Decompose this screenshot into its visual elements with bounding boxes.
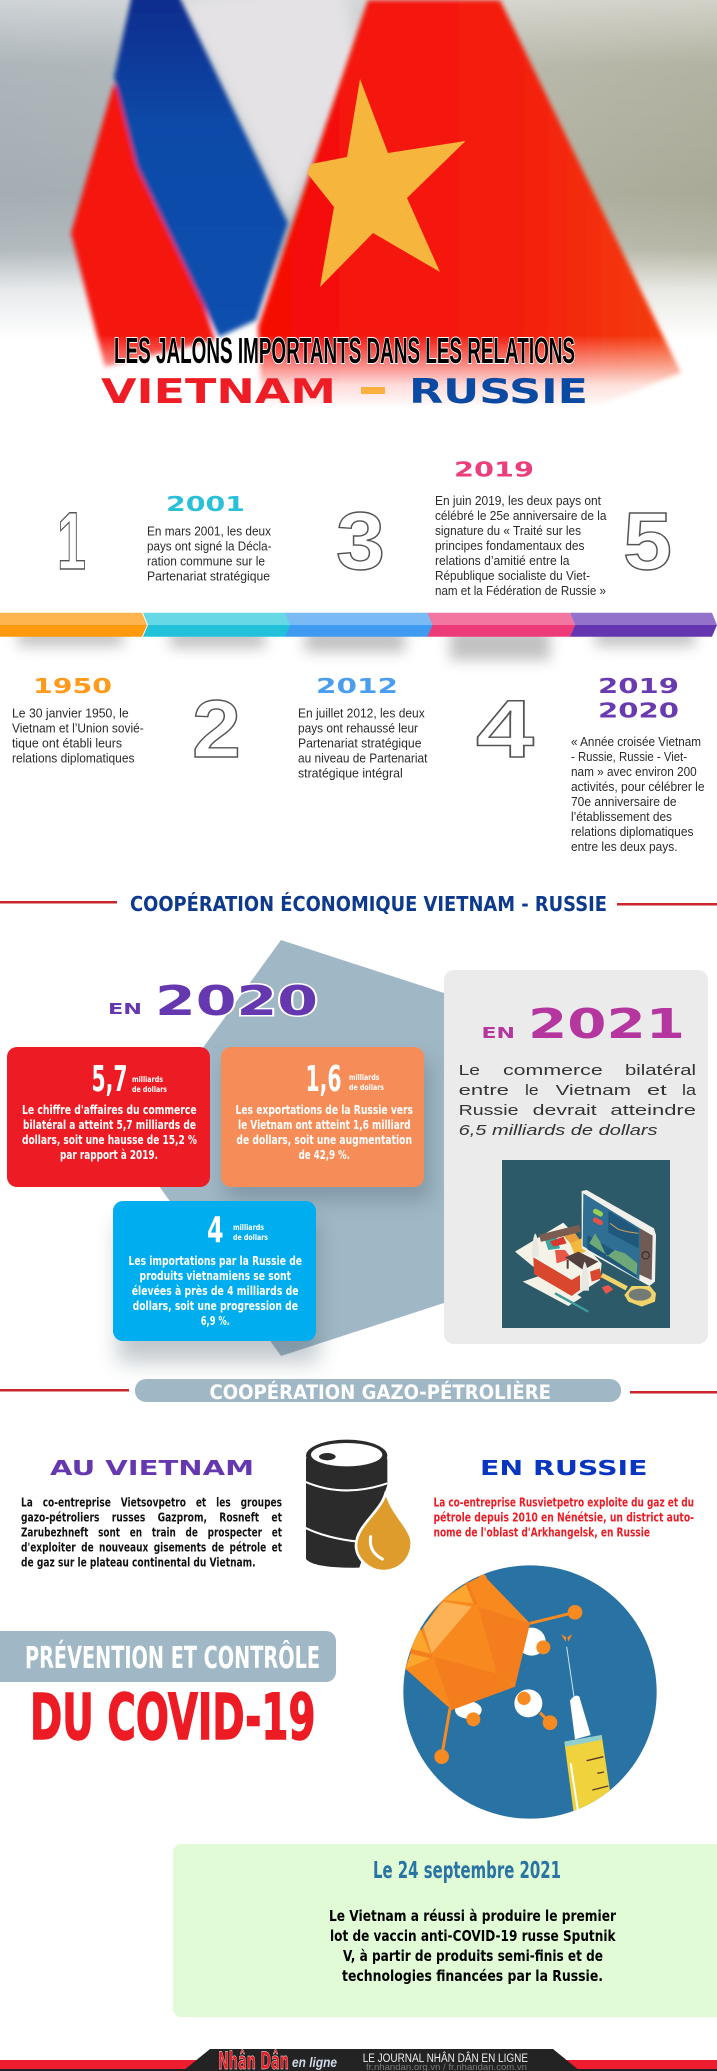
white stripe of the Russian flag (176, 0, 365, 223)
description: V, à partir de produits semi-finis et de (343, 1947, 603, 1965)
panel: en 2021 (444, 970, 708, 1344)
description: de 42,9 %. (299, 1148, 350, 1162)
milestone 2012 (298, 496, 428, 781)
description: nam » avec environ 200 (571, 765, 697, 779)
description: activités, pour célébrer le (571, 780, 705, 794)
heading: en 2020 (108, 977, 318, 1025)
segment 3 (285, 613, 433, 637)
figure: 1,6 (306, 1059, 342, 1100)
logo: en ligne (292, 2054, 337, 2070)
segment 5 (570, 613, 717, 637)
description: pays ont signé la Décla- (147, 540, 272, 554)
pencil (540, 1228, 580, 1247)
heading: 2021 (528, 1000, 685, 1048)
description: 6,5 milliards de dollars (459, 1122, 658, 1139)
section heading: oil and gas cooperation: COOPÉRATION GAZO-PÉTROLIÈRE (210, 1381, 551, 1404)
virus (405, 1574, 582, 1764)
description: de dollars, soit une augmentation (236, 1133, 412, 1147)
description: pays ont rehaussé leur (298, 722, 418, 736)
description: ration commune sur le (147, 555, 265, 569)
description: élevées à près de 4 milliards de (132, 1284, 299, 1298)
table (565, 1252, 598, 1270)
illustration: isometric trade dashboard (502, 1160, 670, 1328)
description: par rapport à 2019. (60, 1148, 158, 1162)
description: célébré le 25e anniversaire de la (435, 509, 607, 523)
description: atteindre (610, 1102, 696, 1119)
syringe (561, 1634, 610, 1811)
description: Vietnam (556, 1082, 631, 1099)
description: République socialiste du Viet- (435, 569, 590, 583)
star (307, 79, 466, 287)
description (435, 494, 607, 598)
barrel (305, 1440, 387, 1568)
description (298, 707, 428, 781)
pill (0, 1631, 336, 1682)
icon: oil barrel with drop (305, 1440, 412, 1571)
hero photo: flags of Russia and Vietnam (0, 0, 717, 430)
figure: de dollars (349, 1083, 384, 1092)
figure: de dollars (132, 1085, 167, 1094)
description: entre (459, 1082, 509, 1099)
years: 2019 (598, 674, 679, 698)
description: 70e anniversaire de (571, 795, 677, 809)
section heading: oil and gas cooperation (0, 1379, 717, 1404)
card: bilateral trade (7, 1047, 210, 1187)
description: produits vietnamiens se sont (140, 1269, 291, 1283)
description: En mars 2001, les deux (147, 525, 272, 539)
figure: de dollars (233, 1233, 268, 1242)
description: relations diplomatiques (571, 825, 694, 839)
title line 2: Russie: RUSSIE (409, 372, 588, 412)
sofa (533, 1257, 580, 1296)
year: 2019 (454, 458, 534, 482)
description: dollars, soit une progression de (133, 1299, 298, 1313)
description (236, 1103, 413, 1162)
title line 2: Vietnam: VIETNAM (101, 372, 336, 412)
dash (361, 387, 385, 394)
towers (532, 1233, 589, 1291)
description: et (647, 1082, 668, 1099)
description: gazo-pétroliers russes Gazprom, Rosneft et (21, 1511, 282, 1525)
number 5: 5 (623, 496, 672, 587)
panel: 24 September 2021 (173, 1844, 717, 2017)
description: relations d’amitié entre la (435, 554, 570, 568)
description: lot de vaccin anti-COVID-19 russe Sputnik (330, 1927, 616, 1945)
description (21, 1496, 282, 1570)
description (434, 1496, 694, 1540)
description: entre les deux pays. (571, 840, 678, 854)
description: nome de l'oblast d'Arkhangelsk, en Russie (434, 1526, 650, 1540)
milestone 2019-2020 (571, 496, 705, 854)
heading: EN RUSSIE (480, 1456, 648, 1480)
description (147, 525, 272, 584)
years: 2020 (598, 699, 679, 723)
description: Le Vietnam a réussi à produire le premier (329, 1907, 616, 1925)
blurred background (0, 0, 717, 324)
card: exports (221, 1047, 424, 1187)
description: « Année croisée Vietnam (571, 735, 701, 749)
description: le Vietnam ont atteint 1,6 milliard (238, 1118, 411, 1132)
description: le (525, 1082, 539, 1099)
oil drop (356, 1492, 412, 1571)
description: commerce (503, 1062, 603, 1079)
number 1: 1 (57, 496, 86, 587)
description: dollars, soit une hausse de 15,2 % (22, 1133, 197, 1147)
description: au niveau de Partenariat (298, 752, 428, 766)
heading: en 2020: 2020 (155, 977, 318, 1025)
description: d'exploiter de nouveaux gisements de pétrole et (21, 1541, 282, 1555)
Russian flag (71, 0, 288, 367)
description: La co-entreprise Vietsovpetro et les groupes (21, 1496, 282, 1510)
footer (0, 2047, 717, 2071)
heading (482, 1000, 685, 1048)
description: stratégique intégral (298, 767, 403, 781)
description (329, 1907, 616, 1985)
description: Le (459, 1062, 480, 1079)
description: - Russie, Russie - Viet- (571, 750, 687, 764)
description: de gaz sur le plateau continental du Vietnam. (21, 1556, 256, 1570)
figure: milliards (132, 1075, 163, 1084)
heading line 2: DU COVID-19 (30, 1681, 316, 1754)
description: Vietnam et l’Union sovié- (12, 722, 144, 736)
figure: milliards (233, 1223, 264, 1232)
dark plate (183, 2049, 580, 2071)
background pentagon (131, 940, 444, 1356)
date: Le 24 septembre 2021 (373, 1858, 561, 1884)
description (571, 735, 705, 854)
column: en Russie (434, 1456, 694, 1540)
description: signature du « Traité sur les (435, 524, 581, 538)
description: principes fondamentaux des (435, 539, 584, 553)
heading: en 2020: EN (108, 1000, 142, 1018)
description: Russie (459, 1102, 518, 1119)
years (598, 674, 679, 723)
number 4: 4 (476, 684, 534, 775)
paper sheets (515, 1223, 602, 1306)
description (12, 707, 144, 766)
description: Zarubezhneft sont en train de prospecter et (21, 1526, 282, 1540)
milestone 1950 (12, 496, 144, 766)
description: Le 30 janvier 1950, le (12, 707, 129, 721)
year: 2012 (316, 674, 398, 698)
Vietnamese flag (258, 0, 681, 405)
white fade (98, 337, 684, 409)
title (101, 330, 588, 412)
heading: EN (482, 1024, 515, 1042)
description: l’établissement des (571, 810, 672, 824)
description: bilatéral (625, 1062, 696, 1079)
card: imports (113, 1201, 316, 1341)
year: 1950 (33, 674, 112, 698)
figure: milliards (349, 1073, 380, 1082)
milestone 2019 (435, 458, 607, 775)
year: 2001 (166, 492, 245, 516)
segment 4 (428, 613, 575, 637)
description: En juillet 2012, les deux (298, 707, 425, 721)
description (22, 1103, 197, 1162)
publication name: LE JOURNAL NHÂN DÂN EN LIGNE (363, 2052, 528, 2065)
eraser and pen (555, 1285, 613, 1312)
description: devrait (533, 1102, 598, 1119)
illustration: virus and vaccine syringe (403, 1565, 657, 1823)
column: au Vietnam (21, 1456, 282, 1570)
description: 6,9 %. (201, 1314, 230, 1328)
magnifying glass (602, 1275, 656, 1307)
red band (0, 2060, 717, 2069)
number 3: 3 (336, 496, 385, 587)
description (459, 1062, 697, 1139)
section heading: economic cooperation: COOPÉRATION ÉCONOMIQUE VIETNAM - RUSSIE (130, 892, 607, 916)
description: Les importations par la Russie de (128, 1254, 302, 1268)
milestone 2001 (147, 492, 272, 775)
description: bilatéral a atteint 5,7 milliards de (23, 1118, 196, 1132)
number 2: 2 (192, 684, 241, 775)
description: la (682, 1082, 697, 1099)
timeline arrow (0, 613, 717, 660)
description: nam et la Fédération de Russie » (435, 584, 606, 598)
segment 1 (0, 613, 147, 637)
arrow shadows (18, 628, 695, 660)
description: tique ont établi leurs (12, 737, 122, 751)
figure: 5,7 (92, 1059, 128, 1100)
description: Le chiffre d'affaires du commerce (22, 1103, 197, 1117)
description: En juin 2019, les deux pays ont (435, 494, 601, 508)
heading: AU VIETNAM (50, 1456, 254, 1480)
card shadows (118, 1060, 430, 1362)
description: technologies financées par la Russie. (342, 1967, 603, 1985)
heading: prevention and control of Covid-19 (0, 1631, 336, 1754)
description: Partenariat stratégique (298, 737, 422, 751)
description (128, 1254, 302, 1328)
heading line 1: PRÉVENTION ET CONTRÔLE (25, 1639, 320, 1676)
description: Partenariat stratégique (147, 570, 270, 584)
description: Les exportations de la Russie vers (236, 1103, 413, 1117)
figure: 4 (207, 1210, 224, 1251)
segment 2 (143, 613, 291, 637)
description: relations diplomatiques (12, 752, 134, 766)
figure (207, 1210, 268, 1251)
tablet (582, 1190, 656, 1286)
